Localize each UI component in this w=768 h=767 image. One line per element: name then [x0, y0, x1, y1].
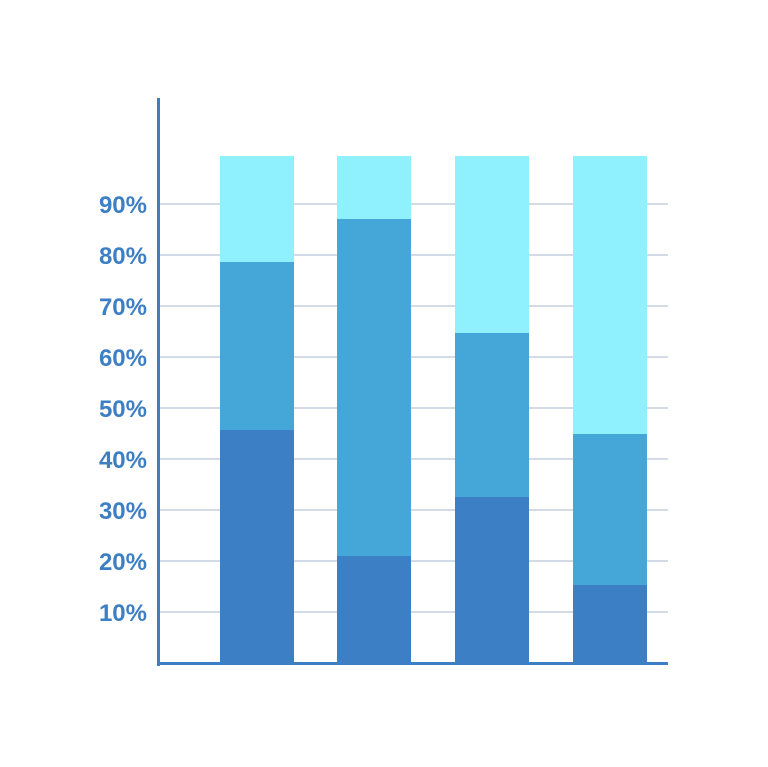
y-axis labels: 60%	[99, 345, 147, 372]
bar 1	[220, 156, 294, 663]
axes	[157, 98, 668, 666]
y-axis labels: 70%	[99, 294, 147, 321]
y-axis labels: 90%	[99, 192, 147, 219]
y-axis labels: 80%	[99, 243, 147, 270]
y-axis labels	[99, 192, 147, 627]
y-axis labels: 40%	[99, 447, 147, 474]
y-axis labels: 50%	[99, 396, 147, 423]
bar 2	[337, 156, 411, 663]
y-axis labels: 20%	[99, 549, 147, 576]
y-axis labels: 10%	[99, 600, 147, 627]
bar 4	[573, 156, 647, 663]
bar 3	[455, 156, 529, 663]
y-axis labels: 30%	[99, 498, 147, 525]
